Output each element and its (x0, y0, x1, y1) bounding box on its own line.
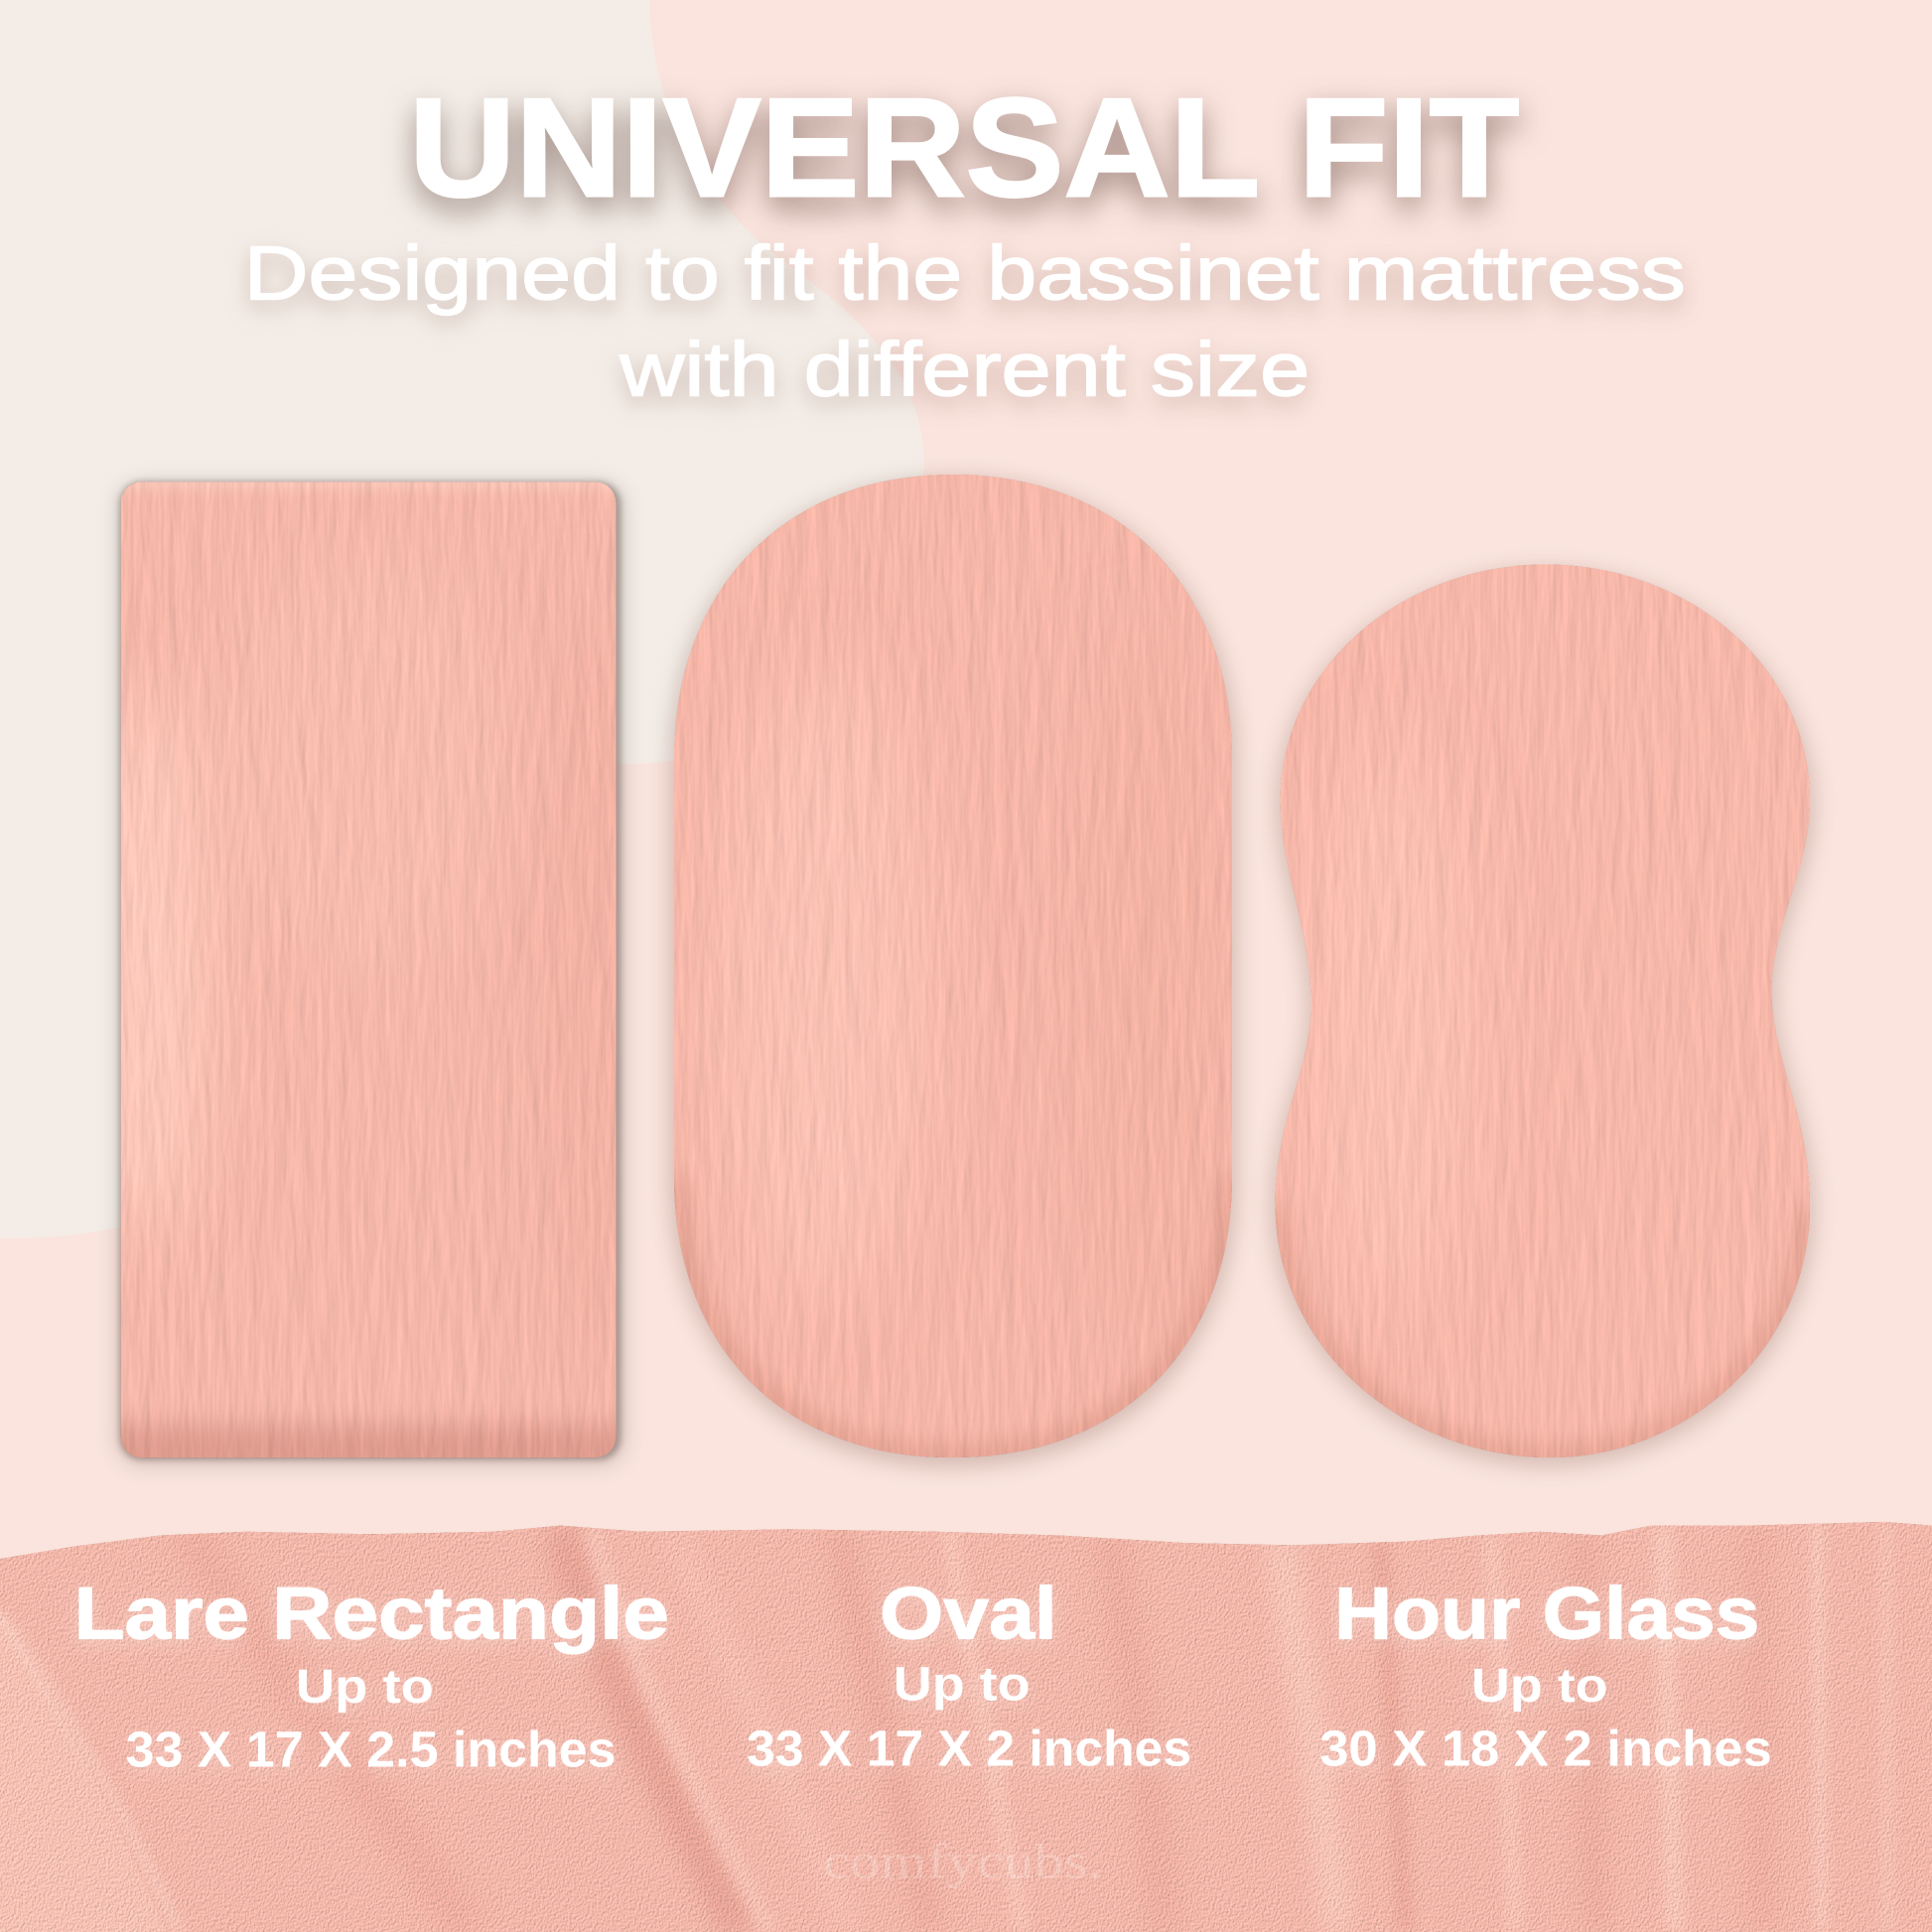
label: hour glass: Hour Glass (1334, 1573, 1759, 1655)
subtitle (244, 231, 1686, 412)
label: lare rectangle: Lare Rectangle (73, 1573, 669, 1655)
label: hour glass: 30 X 18 X 2 inches (1319, 1720, 1772, 1776)
label: lare rectangle: 33 X 17 X 2.5 inches (126, 1722, 617, 1778)
large rectangle mattress sheet (83, 475, 647, 1486)
label: oval (747, 1573, 1191, 1776)
label: oval: Up to (894, 1658, 1031, 1712)
brand watermark: comfycubs. (823, 1834, 1103, 1888)
hourglass mattress sheet (1269, 554, 1818, 1466)
label: oval: 33 X 17 X 2 inches (747, 1720, 1191, 1776)
oval mattress sheet (665, 469, 1244, 1466)
label: oval: Oval (880, 1573, 1057, 1655)
subtitle: Designed to fit the bassinet mattress (244, 231, 1686, 317)
muslin fabric strip (0, 1516, 1932, 1932)
subtitle: with different size (619, 327, 1310, 412)
label: lare rectangle (73, 1573, 669, 1778)
label: hour glass (1319, 1573, 1772, 1776)
title: UNIVERSAL FIT (409, 69, 1519, 225)
label: lare rectangle: Up to (296, 1660, 434, 1714)
label: hour glass: Up to (1471, 1659, 1608, 1713)
background cream blob (0, 0, 924, 1238)
